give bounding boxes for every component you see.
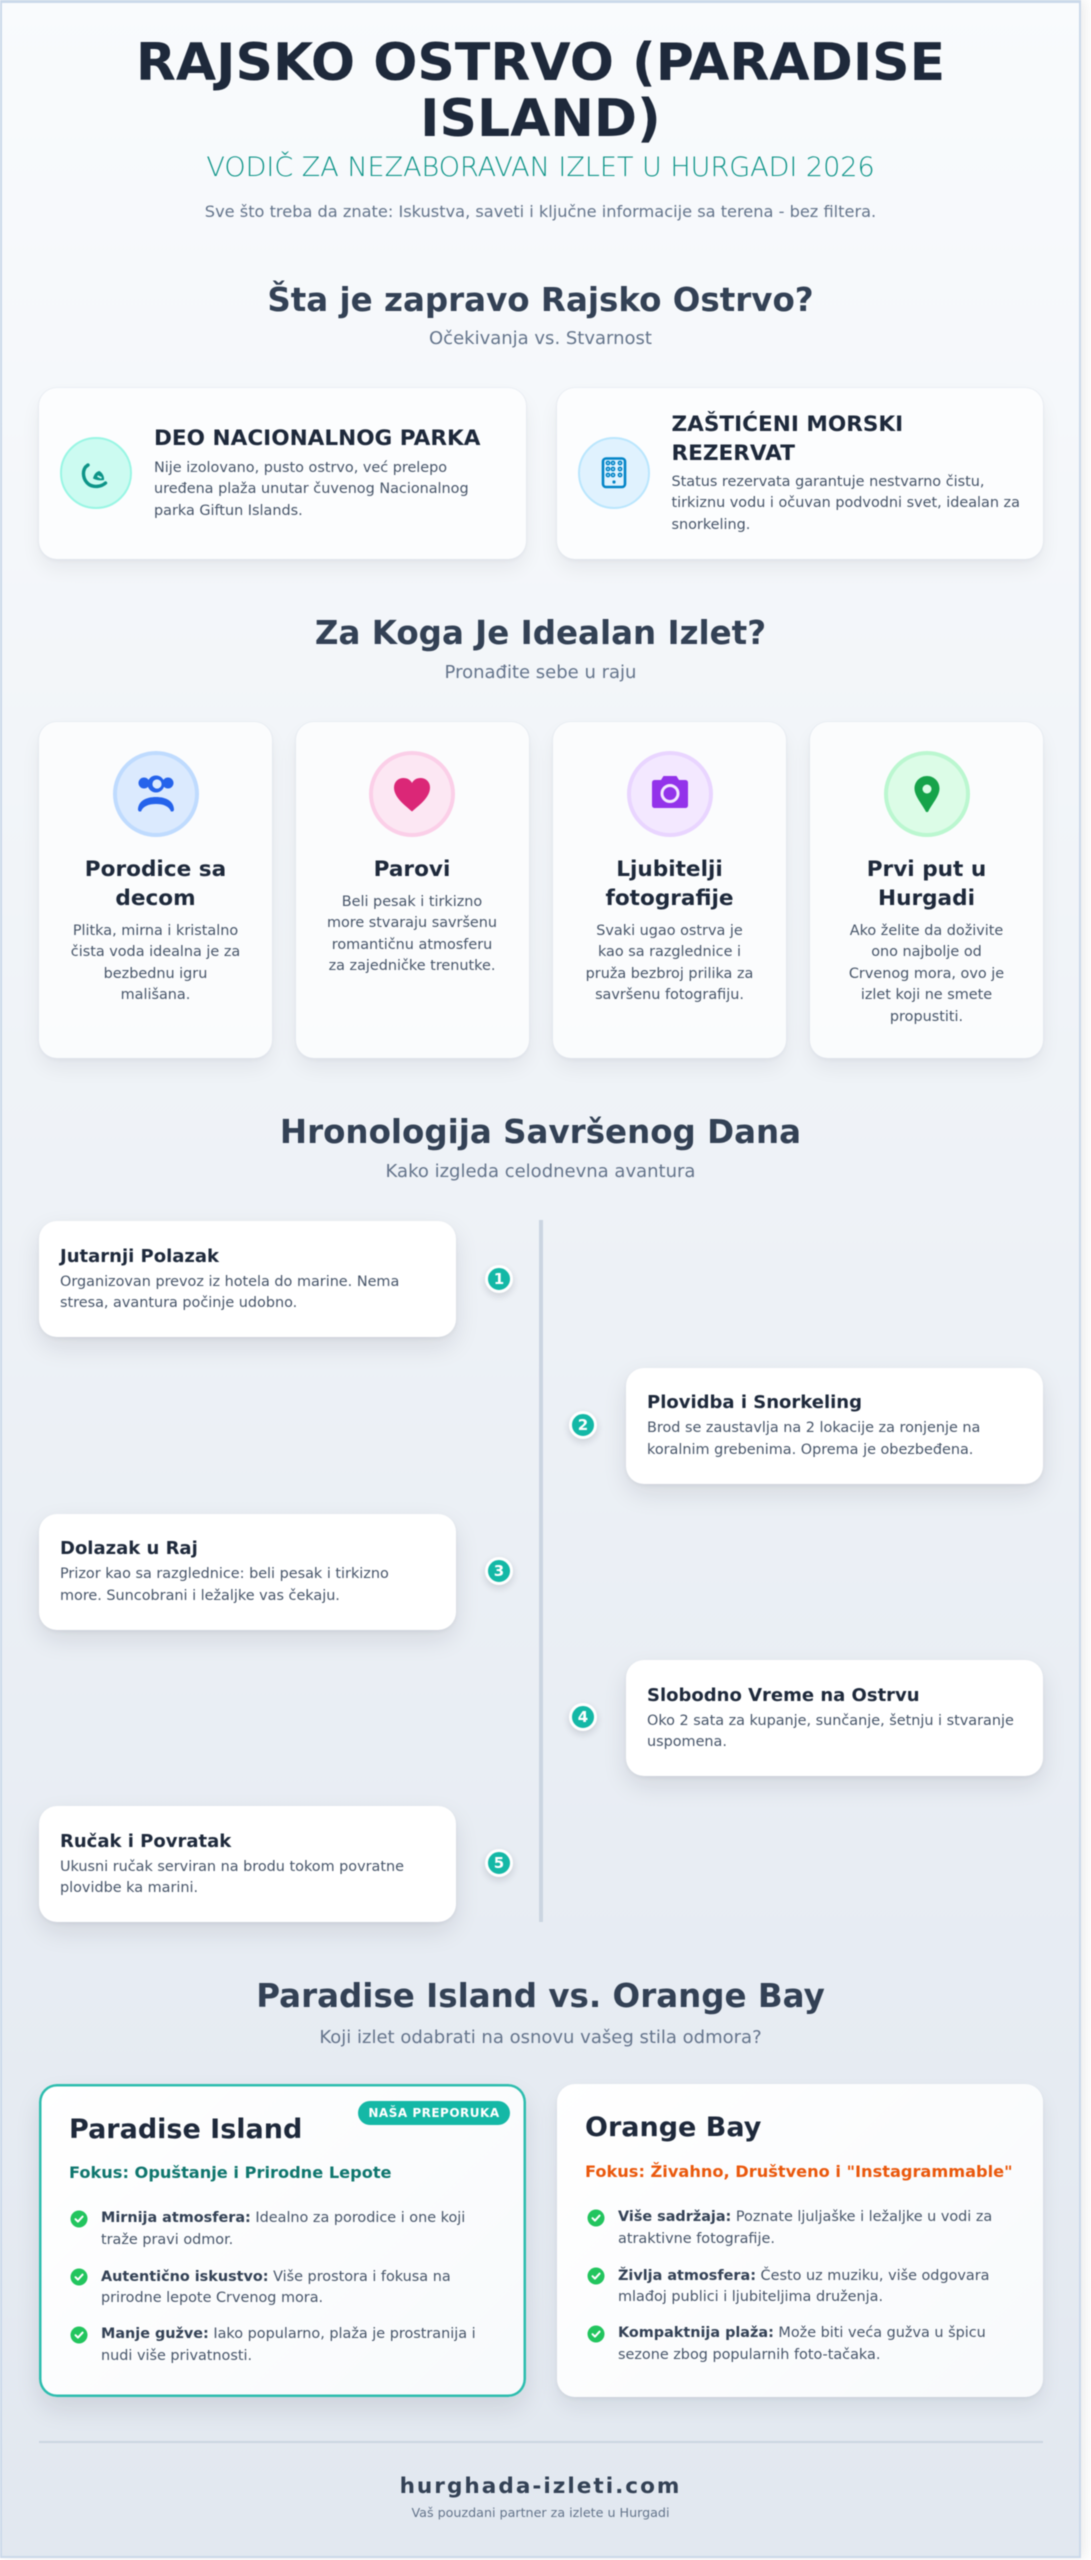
step text: Brod se zaustavlja na 2 lokacije za ronjenje na — [647, 1420, 980, 1436]
icon: map pin — [884, 750, 970, 838]
icon: check — [586, 2208, 606, 2228]
list item — [618, 2208, 992, 2247]
step text: Oko 2 sata za kupanje, sunčanje, šetnju i stvaranje — [647, 1712, 1014, 1728]
step number 5 — [485, 1849, 513, 1877]
timeline step 5 — [39, 1806, 456, 1922]
card text: ono najbolje od — [871, 944, 982, 960]
heading: comparison: Paradise Island vs. Orange Bay — [256, 1977, 825, 2015]
list item — [100, 2268, 451, 2306]
list item: mlađoj publici i ljubiteljima druženja. — [618, 2289, 883, 2305]
list item: atraktivne fotografije. — [618, 2231, 775, 2247]
card title: Prvi put u — [867, 856, 986, 882]
icon: check — [586, 2266, 606, 2286]
step text — [647, 1712, 1014, 1750]
card title: Porodice sa — [85, 856, 226, 882]
icon: check — [586, 2324, 606, 2344]
card text: Crvenog mora, ovo je — [849, 966, 1004, 982]
card text: more stvaraju savršenu — [327, 915, 497, 931]
panel text: Status rezervata garantuje nestvarno čistu, — [672, 474, 984, 490]
option focus: Fokus: Živahno, Društveno i "Instagrammable" — [585, 2162, 1013, 2181]
step text: Organizovan prevoz iz hotela do marine. Nema — [60, 1274, 399, 1290]
list item: Autentično iskustvo: Više prostora i fokusa na — [101, 2268, 451, 2284]
timeline step 1 — [39, 1221, 456, 1337]
step text — [60, 1566, 389, 1604]
heading: what is the island: Šta je zapravo Rajsko Ostrvo? — [267, 281, 814, 319]
card text: savršenu fotografiju. — [595, 987, 744, 1003]
card text: romantičnu atmosferu — [332, 937, 492, 953]
icon: check — [70, 2210, 88, 2228]
step text: uspomena. — [647, 1734, 727, 1750]
step number 2: 2 — [578, 1416, 588, 1434]
card title — [867, 856, 986, 910]
panel text: tirkiznu vodu i očuvan podvodni svet, idealan za — [672, 495, 1020, 511]
step text: koralnim grebenima. Oprema je obezbeđena. — [647, 1442, 973, 1458]
panel: first timers — [810, 722, 1043, 1058]
card title — [605, 856, 734, 910]
timeline axis — [539, 1220, 543, 1922]
panel: couples — [296, 722, 529, 1058]
subheading: find yourself: Pronađite sebe u raju — [445, 662, 636, 683]
timeline step 4 — [626, 1660, 1043, 1776]
step title: Ručak i Povratak — [60, 1830, 231, 1852]
panel title: ZAŠTIĆENI MORSKI — [672, 412, 903, 436]
list item: traže pravi odmor. — [101, 2232, 233, 2248]
step text — [647, 1420, 980, 1458]
card title: decom — [115, 886, 196, 910]
list item — [101, 2326, 476, 2364]
step number 3 — [485, 1557, 513, 1585]
panel: national park — [39, 388, 526, 559]
card text: Ako želite da doživite — [850, 922, 1003, 938]
icon: camera — [626, 750, 714, 838]
icon: leaf — [60, 436, 132, 510]
icon: family — [112, 750, 200, 838]
card text: izlet koji ne smete — [861, 987, 992, 1003]
panel: families — [39, 722, 272, 1058]
list item: Kompaktnija plaža: Može biti veća gužva u špicu — [618, 2325, 986, 2341]
timeline step 2 — [626, 1368, 1043, 1484]
heading: timeline: Hronologija Savršenog Dana — [280, 1113, 801, 1151]
step text: stresa, avantura počinje udobno. — [60, 1295, 297, 1311]
step number 4 — [569, 1703, 597, 1731]
option title: Paradise Island — [69, 2114, 302, 2145]
card text — [327, 894, 497, 974]
card title: Parovi — [374, 856, 450, 882]
card text: pruža bezbroj prilika za — [586, 966, 753, 982]
list item: prirodne lepote Crvenog mora. — [101, 2290, 323, 2306]
heading: for whom: Za Koga Je Idealan Izlet? — [315, 614, 766, 652]
tagline: Sve što treba da znate: Iskustva, saveti i ključne informacije sa terena - bez filtera. — [205, 202, 876, 221]
subheading: comparison: Koji izlet odabrati na osnovu vašeg stila odmora? — [319, 2026, 762, 2048]
step number 3: 3 — [494, 1562, 504, 1580]
icon: check — [70, 2326, 88, 2344]
panel text: parka Giftun Islands. — [154, 503, 303, 519]
list item — [100, 2210, 465, 2248]
panel text — [154, 460, 469, 519]
footer brand: hurghada-izleti.com — [400, 2474, 681, 2499]
card text: čista voda idealna je za — [71, 944, 240, 960]
list item: Više sadržaja: Poznate ljuljaške i ležaljke u vodi za — [618, 2209, 992, 2225]
list item — [618, 2266, 989, 2305]
badge: recommendation: NAŠA PREPORUKA — [368, 2106, 500, 2120]
step number 5: 5 — [494, 1854, 504, 1872]
card title: Ljubitelji — [616, 856, 723, 882]
card text: kao sa razglednice i — [598, 944, 741, 960]
card text: za zajedničke trenutke. — [329, 958, 495, 974]
step text: plovidbe ka marini. — [60, 1880, 198, 1896]
list item: Življa atmosfera: Često uz muziku, više odgovara — [618, 2268, 989, 2284]
option title: Orange Bay — [585, 2112, 761, 2143]
panel text — [671, 474, 1020, 533]
step text: Prizor kao sa razglednice: beli pesak i tirkizno — [60, 1566, 389, 1582]
step title: Dolazak u Raj — [60, 1538, 198, 1559]
step title: Slobodno Vreme na Ostrvu — [647, 1684, 920, 1706]
card text: Svaki ugao ostrva je — [596, 922, 743, 938]
panel title: REZERVAT — [672, 440, 795, 466]
panel: Orange Bay — [556, 2084, 1043, 2397]
panel text: uređena plaža unutar čuvenog Nacionalnog — [154, 481, 469, 497]
step text — [60, 1274, 399, 1311]
subheading: expectations: Očekivanja vs. Stvarnost — [429, 328, 652, 349]
icon: heart — [368, 750, 456, 838]
option focus: Fokus: Opuštanje i Prirodne Lepote — [69, 2163, 392, 2182]
list item: nudi više privatnosti. — [101, 2348, 252, 2364]
step number 2 — [569, 1411, 597, 1439]
panel: Paradise Island — [39, 2084, 526, 2397]
step text — [60, 1858, 404, 1896]
title: ISLAND) — [420, 88, 661, 148]
list item — [618, 2324, 986, 2363]
step number 4: 4 — [578, 1708, 588, 1726]
icon: reserve device — [578, 436, 650, 510]
panel text: Nije izolovano, pusto ostrvo, već prelepo — [154, 460, 447, 476]
card text: propustiti. — [890, 1009, 963, 1025]
badge: recommendation — [358, 2101, 510, 2125]
card text — [586, 922, 753, 1003]
panel title: DEO NACIONALNOG PARKA — [154, 426, 480, 451]
title: RAJSKO OSTRVO (PARADISE — [136, 33, 945, 93]
card title: fotografije — [605, 886, 734, 910]
card text: Beli pesak i tirkizno — [342, 894, 482, 910]
step number 1 — [485, 1265, 513, 1293]
step title: Jutarnji Polazak — [60, 1246, 219, 1266]
list item: sezone zbog popularnih foto-tačaka. — [618, 2347, 880, 2363]
card text — [848, 922, 1004, 1025]
step text: Ukusni ručak serviran na brodu tokom povratne — [60, 1858, 404, 1874]
subtitle: VODIČ ZA NEZABORAVAN IZLET U HURGADI 2026 — [206, 152, 875, 183]
card title — [85, 856, 226, 910]
icon: check — [70, 2268, 88, 2286]
timeline step 3 — [39, 1514, 456, 1630]
subheading: timeline: Kako izgleda celodnevna avantura — [386, 1161, 695, 1182]
panel title — [672, 410, 903, 466]
card text — [70, 922, 240, 1003]
card text: mališana. — [121, 987, 190, 1003]
panel: marine reserve — [556, 388, 1043, 559]
title — [136, 33, 945, 148]
step number 1: 1 — [494, 1270, 504, 1288]
list item: Mirnija atmosfera: Idealno za porodice i one koji — [101, 2210, 465, 2226]
step text: more. Suncobrani i ležaljke vas čekaju. — [60, 1588, 340, 1604]
list item: Manje gužve: Iako popularno, plaža je prostranija i — [101, 2326, 476, 2342]
card text: bezbednu igru — [104, 966, 207, 982]
step title: Plovidba i Snorkeling — [647, 1392, 862, 1413]
card text: Plitka, mirna i kristalno — [73, 922, 238, 938]
card title: Hurgadi — [878, 886, 975, 910]
panel: photographers — [553, 722, 786, 1058]
footer tagline: Vaš pouzdani partner za izlete u Hurgadi — [411, 2505, 670, 2520]
panel text: snorkeling. — [672, 517, 750, 533]
